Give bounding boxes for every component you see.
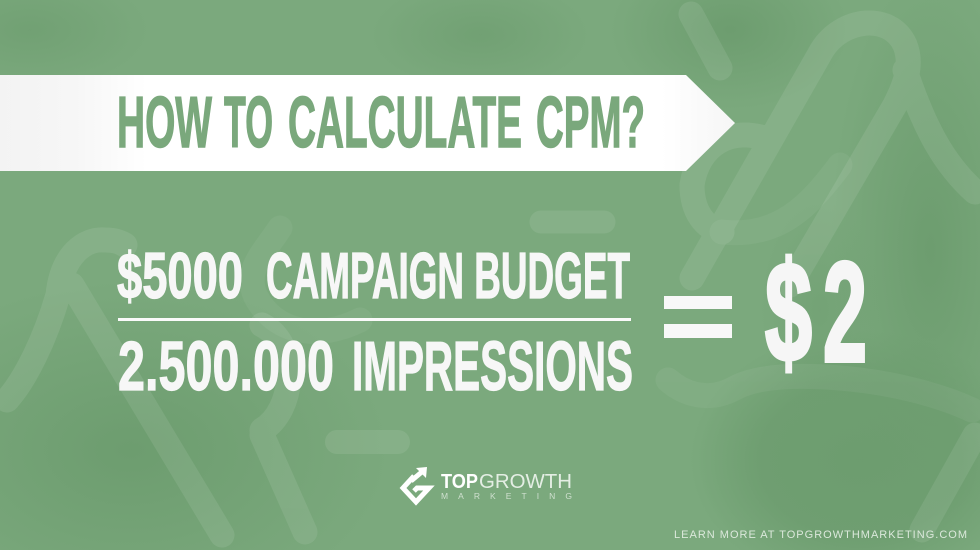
- logo wordmark: MARKETING: [441, 491, 572, 501]
- denominator: IMPRESSIONS: [352, 327, 633, 405]
- numerator: [117, 239, 630, 312]
- logo wordmark: TOP: [441, 471, 478, 493]
- logo icon: [403, 467, 429, 502]
- formula: [117, 239, 633, 405]
- logo: [403, 467, 572, 502]
- banner title text: CPM?: [536, 83, 645, 163]
- numerator: $5000: [117, 239, 243, 312]
- footer link: LEARN MORE AT TOPGROWTHMARKETING.COM: [674, 529, 967, 541]
- result value: 2: [823, 233, 867, 392]
- logo wordmark: [441, 471, 572, 501]
- title banner: [0, 75, 735, 171]
- banner title text: CALCULATE: [288, 83, 522, 163]
- denominator: [118, 327, 633, 405]
- logo wordmark: GROWTH: [479, 471, 572, 493]
- denominator: 2.500.000: [118, 327, 334, 405]
- fraction line: [118, 318, 631, 321]
- result value: $: [765, 233, 812, 392]
- numerator: CAMPAIGN BUDGET: [266, 239, 630, 312]
- banner title text: HOW: [117, 83, 212, 163]
- faint route lines: [252, 165, 972, 410]
- banner title text: TO: [224, 83, 273, 163]
- banner title text: [117, 83, 645, 163]
- equals sign: [664, 296, 732, 338]
